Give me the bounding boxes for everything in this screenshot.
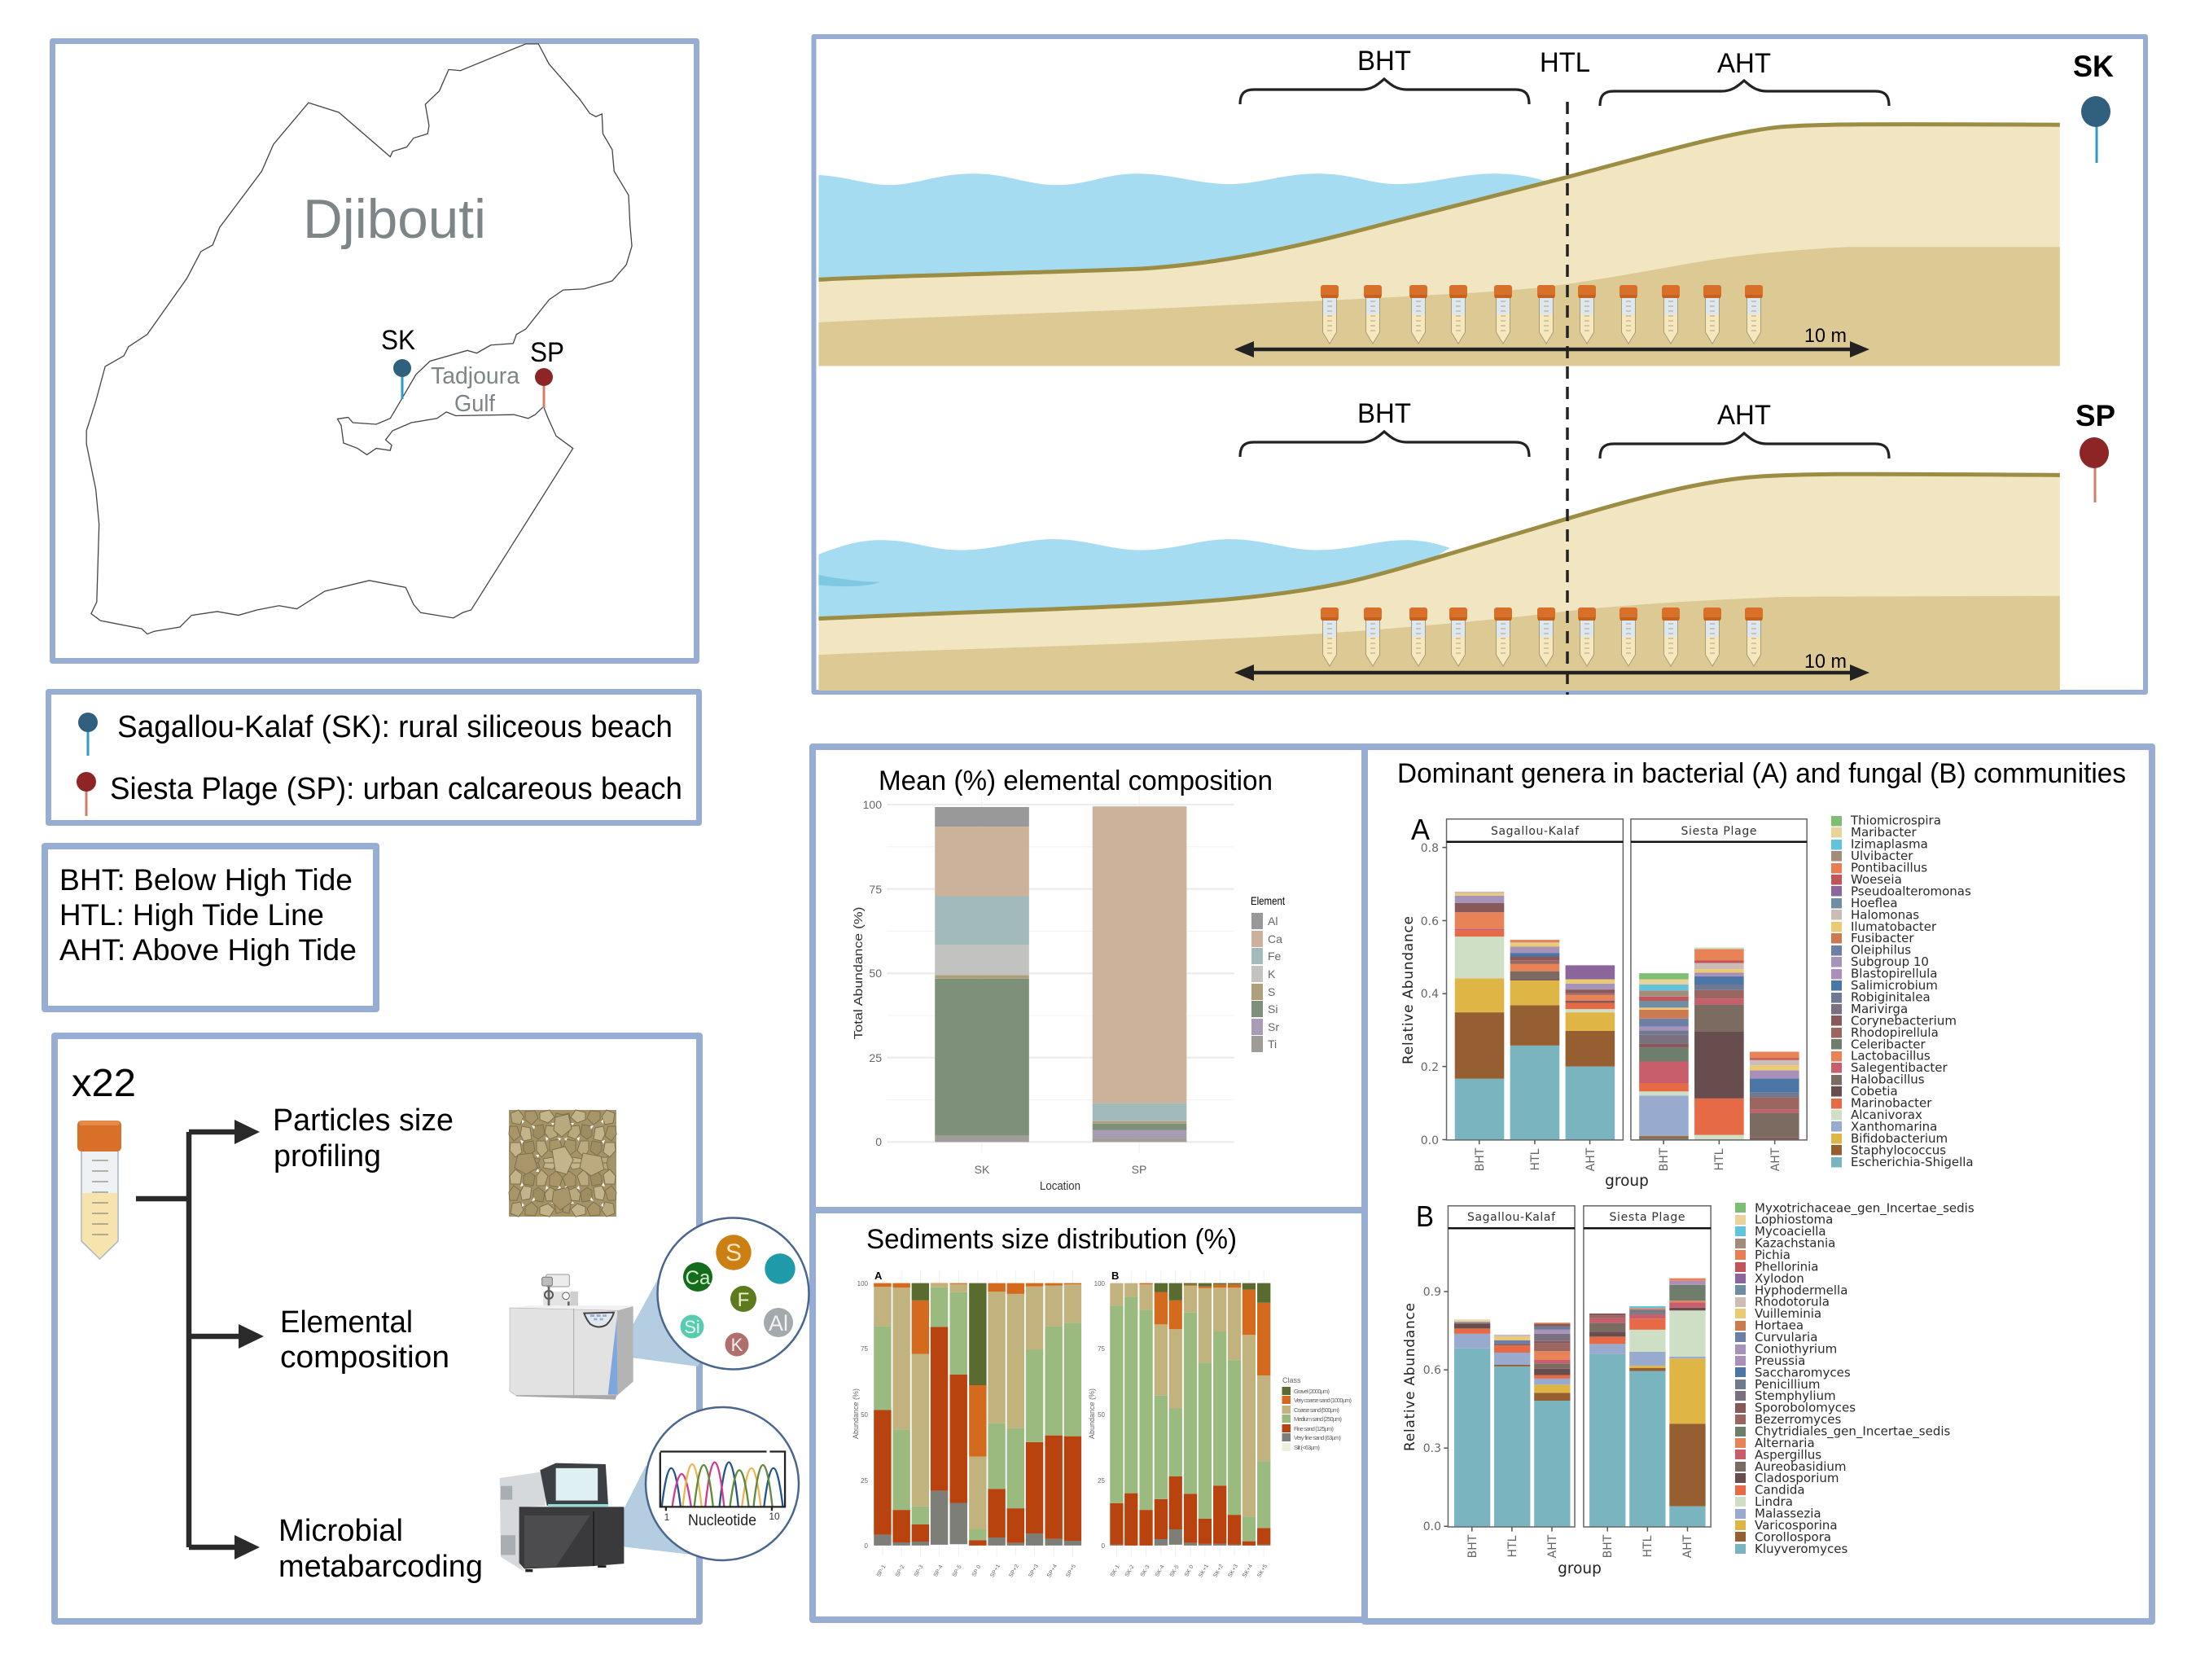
legend row: Siesta Plage: Siesta Plage (SP): urban calcareous beach bbox=[110, 772, 682, 806]
fungal legend: Lindra bbox=[1755, 1494, 1793, 1509]
bracket AHT SP bbox=[1600, 433, 1889, 458]
fungal legend: Saccharomyces bbox=[1755, 1365, 1851, 1380]
icon: sequencer bbox=[500, 1463, 624, 1572]
legend row: Sagallou-Kalaf bbox=[78, 710, 673, 756]
elemental title: Mean (%) elemental composition bbox=[879, 765, 1273, 796]
bacterial legend: Salimicrobium bbox=[1851, 978, 1938, 993]
bacterial legend: Staphylococcus bbox=[1851, 1143, 1946, 1157]
bacterial legend: Bifidobacterium bbox=[1851, 1131, 1948, 1146]
country label: Djibouti bbox=[303, 188, 486, 250]
distance arrow SP bbox=[1234, 651, 1869, 681]
fungal chart B: AHT bbox=[1681, 1534, 1694, 1558]
bacterial legend: Woeseia bbox=[1851, 872, 1902, 887]
bacterial legend: Maribacter bbox=[1851, 825, 1918, 840]
arrow to metabarcoding bbox=[189, 1535, 260, 1559]
bracket BHT SP bbox=[1240, 432, 1529, 457]
bacterial chart A: BHT bbox=[1474, 1147, 1487, 1171]
bacterial chart A: 0.0 bbox=[1421, 1134, 1439, 1147]
y axis ticks: 50 bbox=[869, 967, 882, 980]
fungal legend: Xylodon bbox=[1755, 1271, 1804, 1286]
panel: dominant genera bbox=[1365, 747, 2152, 1621]
fungal legend bbox=[1735, 1200, 1975, 1556]
fungal legend: Kazachstania bbox=[1755, 1236, 1835, 1251]
fungal chart B: BHT bbox=[1466, 1534, 1479, 1558]
bacterial legend: Xanthomarina bbox=[1851, 1119, 1937, 1134]
chromatogram labels bbox=[664, 1511, 780, 1529]
bacterial legend: Izimaplasma bbox=[1851, 837, 1928, 852]
magnifier cone: elements bbox=[619, 1276, 733, 1366]
fungal legend: Stemphylium bbox=[1755, 1388, 1836, 1403]
bacterial chart A: AHT bbox=[1584, 1147, 1598, 1171]
sediment axis labels: Abundance (%) bbox=[1088, 1388, 1096, 1439]
fungal legend: Phellorinia bbox=[1755, 1259, 1819, 1274]
sample labels B: SK 0 bbox=[1184, 1564, 1195, 1578]
sample labels B: SK+5 bbox=[1256, 1564, 1269, 1579]
fungal legend: Aspergillus bbox=[1755, 1447, 1821, 1462]
bacterial legend: Cobetia bbox=[1851, 1084, 1898, 1099]
beach scene SP bbox=[818, 474, 2060, 691]
label: particles: Particles size bbox=[273, 1103, 454, 1138]
fungal legend: Curvularia bbox=[1755, 1330, 1817, 1344]
bacterial chart A: 0.8 bbox=[1421, 842, 1439, 855]
bacterial legend: Escherichia-Shigella bbox=[1851, 1155, 1974, 1169]
axis labels: SP bbox=[1132, 1163, 1146, 1176]
fungal legend: Kluyveromyces bbox=[1755, 1542, 1847, 1556]
chromatogram labels: 10 bbox=[769, 1511, 780, 1522]
sample labels B: SK-2 bbox=[1124, 1564, 1136, 1578]
sample labels B: SK+1 bbox=[1198, 1564, 1210, 1579]
sediment axis labels: B bbox=[1111, 1270, 1119, 1282]
fungal legend: Chytridiales_gen_Incertae_sedis bbox=[1755, 1423, 1951, 1440]
axis labels: SK bbox=[975, 1163, 990, 1176]
element legend: Fe bbox=[1268, 950, 1282, 963]
sample labels A: SP+1 bbox=[989, 1564, 1002, 1579]
genera title: Dominant genera in bacterial (A) and fungal (B) communities bbox=[1397, 758, 2126, 789]
panel: sediment size bbox=[813, 1210, 1365, 1620]
panel: beach transects bbox=[814, 37, 2145, 695]
bacterial legend: Fusibacter bbox=[1851, 931, 1914, 945]
fungal legend: Myxotrichaceae_gen_Incertae_sedis bbox=[1755, 1200, 1975, 1216]
sample labels A: SP+3 bbox=[1028, 1564, 1040, 1579]
y axis ticks: 75 bbox=[869, 883, 882, 896]
bacterial chart A: Relative Abundance bbox=[1400, 916, 1417, 1064]
sediment class legend: Coarse sand (500µm) bbox=[1294, 1406, 1340, 1414]
distance arrow SK bbox=[1234, 325, 1869, 357]
panel: Djibouti map bbox=[52, 41, 697, 661]
fungal legend: Pichia bbox=[1755, 1248, 1790, 1262]
abbreviations text: BHT: Below High Tide bbox=[59, 863, 353, 897]
sediment axis labels: 100 bbox=[1094, 1280, 1106, 1287]
fungal chart B: HTL bbox=[1641, 1535, 1655, 1557]
fungal legend: Alternaria bbox=[1755, 1436, 1815, 1450]
sediment axis labels: A bbox=[874, 1270, 883, 1282]
SK map pin: SK bbox=[381, 325, 415, 356]
element K: K bbox=[731, 1335, 743, 1355]
bacterial chart A: Sagallou-Kalaf bbox=[1491, 825, 1580, 838]
sediment class legend: Medium sand (250µm) bbox=[1294, 1415, 1342, 1423]
bacterial legend: Ilumatobacter bbox=[1851, 919, 1937, 934]
sediment axis labels: 100 bbox=[857, 1280, 869, 1287]
bacterial legend bbox=[1831, 814, 1974, 1169]
fungal legend: Bezerromyces bbox=[1755, 1412, 1842, 1427]
sediment axis labels: 75 bbox=[861, 1345, 869, 1353]
fungal chart B: Relative Abundance bbox=[1402, 1303, 1418, 1451]
abbreviations text: HTL: High Tide Line bbox=[59, 898, 324, 932]
bracket BHT SK bbox=[1240, 79, 1529, 104]
fungal legend: Corollospora bbox=[1755, 1529, 1831, 1544]
axis labels: Location bbox=[1040, 1179, 1080, 1193]
fungal legend: Vuilleminia bbox=[1755, 1306, 1821, 1321]
sediment axis labels: 0 bbox=[1102, 1542, 1106, 1550]
label: microbial: Microbial bbox=[278, 1514, 403, 1548]
sample labels B: SK+3 bbox=[1227, 1564, 1239, 1579]
sediment axis labels: 50 bbox=[861, 1411, 869, 1419]
element Al: Al bbox=[769, 1311, 788, 1336]
sediment axis labels: 25 bbox=[861, 1477, 869, 1485]
site marker SK: SK bbox=[2073, 50, 2114, 83]
workflow branching lines bbox=[136, 1132, 189, 1547]
chromatogram peaks bbox=[660, 1452, 785, 1511]
beach scene SK bbox=[818, 125, 2060, 366]
sediment class legend: Silt (<63µm) bbox=[1294, 1444, 1321, 1451]
sample labels A: SP 0 bbox=[971, 1564, 983, 1578]
label: elemental bbox=[280, 1305, 449, 1375]
sample labels B: SK-4 bbox=[1155, 1564, 1166, 1578]
label: microbial bbox=[278, 1514, 483, 1584]
bacterial chart A: 0.6 bbox=[1421, 915, 1439, 928]
magnifier cone: sequencer bbox=[606, 1466, 717, 1555]
fungal legend: Malassezia bbox=[1755, 1507, 1821, 1521]
fungal chart B: Siesta Plage bbox=[1609, 1211, 1685, 1224]
chromatogram labels: Nucleotide bbox=[688, 1512, 756, 1529]
icon: elemental analyser bbox=[510, 1274, 633, 1400]
fungal chart B: HTL bbox=[1506, 1535, 1519, 1557]
zone labels: BHT bbox=[1357, 46, 1411, 77]
panel: laboratory workflow bbox=[55, 1036, 809, 1621]
sample labels A bbox=[876, 1564, 1077, 1579]
fungal legend: Hyphodermella bbox=[1755, 1283, 1847, 1297]
sediment axis labels: Abundance (%) bbox=[852, 1388, 860, 1439]
zone labels bbox=[1357, 46, 1771, 431]
map outline of Djibouti bbox=[86, 44, 632, 634]
sampling tubes SP bbox=[1321, 608, 1763, 666]
bacterial chart A: 0.4 bbox=[1421, 988, 1439, 1001]
fungal chart B: 0.6 bbox=[1423, 1364, 1441, 1377]
bacterial legend: Pontibacillus bbox=[1851, 860, 1927, 875]
panel: elemental composition bbox=[813, 747, 1365, 1210]
bacterial chart A: HTL bbox=[1713, 1148, 1726, 1170]
bacterial legend: Rhodopirellula bbox=[1851, 1025, 1939, 1040]
sediment axis labels: 50 bbox=[1098, 1411, 1106, 1419]
panel: site legend bbox=[49, 692, 699, 822]
label: particles bbox=[273, 1103, 454, 1173]
bacterial legend: Halomonas bbox=[1851, 907, 1919, 922]
element legend: Si bbox=[1268, 1002, 1278, 1015]
bacterial chart A: Siesta Plage bbox=[1681, 825, 1757, 838]
sample labels A: SP-1 bbox=[876, 1564, 888, 1578]
fungal legend: Rhodotorula bbox=[1755, 1295, 1830, 1309]
bacterial legend: Salegentibacter bbox=[1851, 1060, 1948, 1075]
fungal legend: Lophiostoma bbox=[1755, 1213, 1833, 1227]
axis labels bbox=[852, 906, 1146, 1193]
element S bbox=[716, 1235, 752, 1270]
element legend: Al bbox=[1268, 915, 1278, 928]
element legend: Ti bbox=[1268, 1037, 1277, 1051]
sediment class legend: Gravel (2000µm) bbox=[1294, 1388, 1330, 1395]
fungal chart B: AHT bbox=[1546, 1534, 1559, 1558]
sample labels B: SK-5 bbox=[1169, 1564, 1181, 1578]
fungal chart B: 0.0 bbox=[1423, 1520, 1441, 1533]
sediment title: Sediments size distribution (%) bbox=[866, 1224, 1237, 1255]
sediment class legend: Very fine sand (63µm) bbox=[1294, 1434, 1342, 1441]
fungal legend: Mycoaciella bbox=[1755, 1224, 1826, 1239]
stacked bar chart: elements bbox=[852, 794, 1285, 1193]
bacterial legend: Halobacillus bbox=[1851, 1072, 1925, 1087]
fungal legend: Sporobolomyces bbox=[1755, 1401, 1856, 1415]
element F: F bbox=[738, 1289, 749, 1311]
legend row: Sagallou-Kalaf: Sagallou-Kalaf (SK): rural siliceous beach bbox=[117, 710, 673, 744]
sample labels A: SP+5 bbox=[1065, 1564, 1077, 1579]
bacterial legend: Hoeflea bbox=[1851, 896, 1898, 910]
sample tube bbox=[77, 1121, 121, 1259]
SK map pin bbox=[381, 325, 415, 399]
element legend: Ca bbox=[1268, 932, 1282, 945]
label: particles: profiling bbox=[274, 1139, 381, 1173]
element S: S bbox=[725, 1239, 742, 1266]
icon: sediment grains bbox=[509, 1110, 616, 1217]
fungal legend: Preussia bbox=[1755, 1353, 1805, 1368]
label: elemental: composition bbox=[280, 1340, 449, 1375]
bacterial legend: Corynebacterium bbox=[1851, 1013, 1957, 1028]
bacterial legend: Lactobacillus bbox=[1851, 1049, 1931, 1064]
arrow to elemental bbox=[191, 1324, 264, 1349]
sample labels B: SK-3 bbox=[1140, 1564, 1151, 1578]
arrow to particle size bbox=[189, 1120, 260, 1144]
element Si bbox=[681, 1314, 703, 1339]
axis labels: Total Abundance (%) bbox=[852, 906, 866, 1039]
sediment class legend bbox=[1282, 1376, 1352, 1451]
element legend: S bbox=[1268, 985, 1275, 998]
element Ca bbox=[683, 1262, 712, 1292]
fungal legend: Varicosporina bbox=[1755, 1518, 1838, 1533]
y axis ticks bbox=[863, 798, 882, 1148]
distance arrow SK: 10 m bbox=[1804, 325, 1847, 347]
bacterial legend: Marinobacter bbox=[1851, 1096, 1932, 1111]
magnified circle: sequencing trace bbox=[646, 1407, 799, 1560]
bacterial legend: Thiomicrospira bbox=[1850, 814, 1941, 828]
sediment class legend: Class bbox=[1282, 1376, 1301, 1384]
sample labels A: SP-3 bbox=[914, 1564, 925, 1578]
sample labels B: SK+4 bbox=[1242, 1564, 1254, 1579]
element legend: Element bbox=[1251, 894, 1285, 907]
sediment axis labels: 0 bbox=[865, 1542, 869, 1550]
element Ca: Ca bbox=[686, 1267, 711, 1289]
y axis ticks: 25 bbox=[869, 1051, 882, 1064]
bacterial legend: Pseudoalteromonas bbox=[1851, 884, 1971, 898]
panel: abbreviations bbox=[45, 846, 376, 1009]
fungal legend: Candida bbox=[1755, 1483, 1805, 1498]
sample labels A: SP-2 bbox=[895, 1564, 906, 1578]
gulf label bbox=[431, 363, 520, 417]
high tide dashed line bbox=[1566, 102, 1569, 695]
element Al bbox=[764, 1308, 793, 1337]
y axis ticks: 100 bbox=[863, 798, 882, 811]
bacterial legend: Alcanivorax bbox=[1851, 1108, 1922, 1122]
element F bbox=[730, 1286, 756, 1312]
fungal legend: Aureobasidium bbox=[1755, 1459, 1847, 1474]
fungal chart B: BHT bbox=[1602, 1534, 1615, 1558]
sample labels A: SP-4 bbox=[933, 1564, 945, 1578]
sediment class legend: Very coarse sand (1000µm) bbox=[1294, 1397, 1352, 1404]
sediment axis labels bbox=[852, 1270, 1119, 1550]
distance arrow SP: 10 m bbox=[1804, 651, 1847, 673]
site marker SP bbox=[2075, 399, 2115, 502]
fungal chart B: Sagallou-Kalaf bbox=[1467, 1211, 1556, 1224]
magnified circle: elements bbox=[658, 1218, 809, 1370]
fungal legend: Cladosporium bbox=[1755, 1471, 1839, 1485]
gulf label: Gulf bbox=[454, 391, 496, 417]
fungal chart B bbox=[1402, 1200, 1711, 1577]
zone labels: HTL bbox=[1540, 47, 1590, 78]
replicate count: x22 bbox=[72, 1062, 136, 1105]
sample labels A: SP+2 bbox=[1008, 1564, 1020, 1579]
bacterial chart A: HTL bbox=[1529, 1148, 1542, 1170]
bacterial chart A: AHT bbox=[1769, 1147, 1782, 1171]
bacterial chart A: A bbox=[1411, 813, 1430, 846]
sample labels B: SK+2 bbox=[1212, 1564, 1225, 1579]
bacterial legend: Subgroup 10 bbox=[1851, 954, 1929, 969]
element legend: K bbox=[1268, 967, 1276, 980]
sample labels B bbox=[1110, 1564, 1269, 1579]
sediment axis labels: 25 bbox=[1098, 1477, 1106, 1485]
bacterial chart A bbox=[1400, 813, 1807, 1190]
sampling tubes SK bbox=[1321, 285, 1763, 344]
fungal chart B: 0.3 bbox=[1423, 1442, 1441, 1455]
abbreviations text: AHT: Above High Tide bbox=[59, 933, 357, 967]
bacterial legend: Celeribacter bbox=[1851, 1037, 1926, 1051]
element K bbox=[725, 1332, 749, 1357]
bacterial chart A: BHT bbox=[1658, 1147, 1671, 1171]
site marker SK bbox=[2073, 50, 2114, 163]
bracket AHT SK bbox=[1600, 81, 1889, 106]
stacked bars A and B bbox=[883, 1270, 1264, 1556]
bacterial legend: Blastopirellula bbox=[1851, 967, 1937, 981]
zone labels: BHT bbox=[1357, 398, 1411, 429]
chromatogram labels: 1 bbox=[664, 1511, 670, 1523]
bacterial legend: Robiginitalea bbox=[1851, 990, 1931, 1005]
bacterial chart A: group bbox=[1605, 1173, 1649, 1190]
fungal chart B: group bbox=[1558, 1560, 1602, 1577]
fungal chart B: 0.9 bbox=[1423, 1286, 1441, 1299]
gulf label: Tadjoura bbox=[431, 363, 520, 389]
y axis ticks: 0 bbox=[875, 1135, 882, 1148]
sample labels A: SP-5 bbox=[952, 1564, 963, 1578]
bacterial chart A: 0.2 bbox=[1421, 1061, 1439, 1074]
fungal legend: Penicillium bbox=[1755, 1377, 1820, 1392]
element Si: Si bbox=[684, 1317, 700, 1337]
SP map pin: SP bbox=[530, 337, 564, 368]
bacterial legend: Ulvibacter bbox=[1851, 849, 1913, 863]
site marker SP: SP bbox=[2075, 399, 2115, 432]
sample labels B: SK-1 bbox=[1110, 1564, 1121, 1578]
bacterial legend: Oleiphilus bbox=[1851, 943, 1911, 958]
sediment class legend: Fine sand (125µm) bbox=[1294, 1425, 1334, 1432]
zone labels: AHT bbox=[1717, 48, 1771, 79]
fungal chart B: B bbox=[1416, 1200, 1434, 1233]
zone labels: AHT bbox=[1717, 400, 1771, 431]
label: elemental: Elemental bbox=[280, 1305, 413, 1340]
element legend: Sr bbox=[1268, 1020, 1279, 1033]
element legend bbox=[1251, 894, 1285, 1052]
abbreviations text bbox=[59, 863, 357, 967]
label: microbial: metabarcoding bbox=[278, 1550, 483, 1584]
SP map pin bbox=[530, 337, 564, 408]
bacterial legend: Marivirga bbox=[1851, 1002, 1908, 1016]
fungal legend: Coniothyrium bbox=[1755, 1342, 1837, 1357]
sample labels A: SP+4 bbox=[1046, 1564, 1058, 1579]
element unlabelled bbox=[765, 1253, 796, 1284]
fungal legend: Hortaea bbox=[1755, 1318, 1804, 1333]
sediment axis labels: 75 bbox=[1098, 1345, 1106, 1353]
